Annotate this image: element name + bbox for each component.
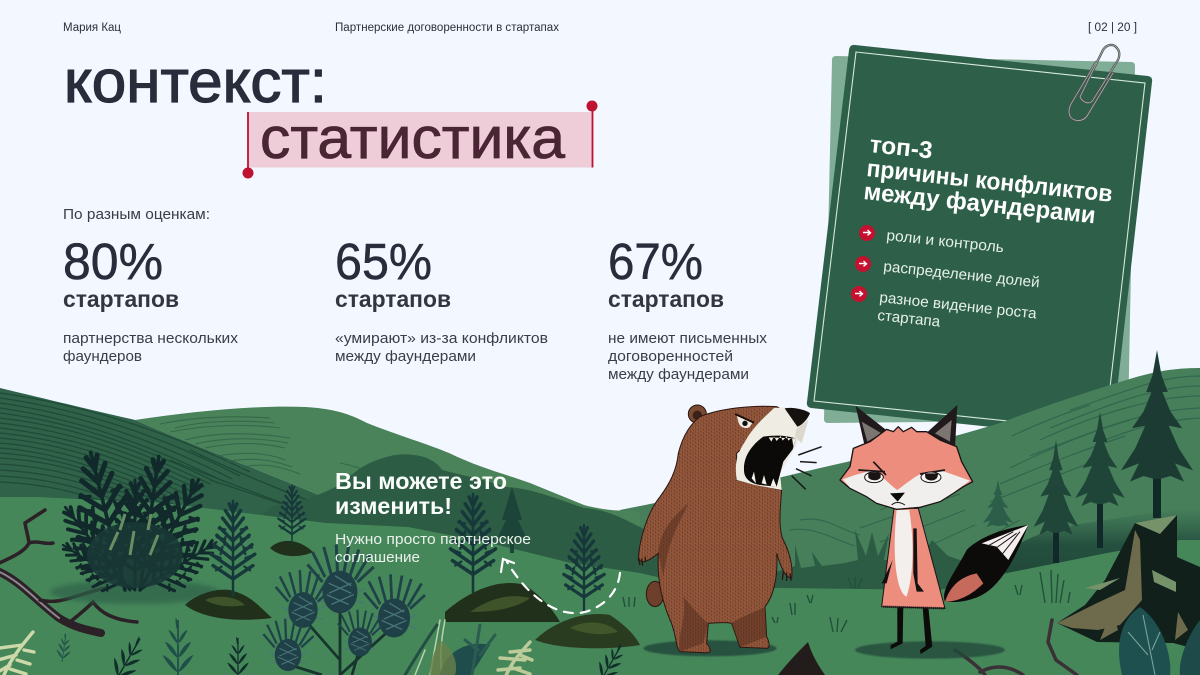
thistle plant [263,544,425,675]
bush shadow [50,580,220,604]
tree: mid fir [1075,412,1125,548]
arrow: dashed curve [501,559,620,613]
hill: left dark [0,388,430,532]
hill: right [620,368,1200,675]
icon: paperclip [1069,45,1119,120]
intro text: По разным оценкам: [63,206,210,223]
hills [0,368,1200,675]
stat 3: стартапов [608,286,724,312]
hill: middle [135,407,640,575]
tree: small fir [1034,440,1078,563]
list of reasons: роли и контроль [886,227,1005,256]
panel: top-3 note card [807,45,1152,439]
hill stripes: right [790,376,1200,560]
fox body [882,508,945,608]
tree: big fir [1121,350,1193,518]
stat 3: не имеют письменных [608,330,768,347]
call-to-action text: Нужно просто партнерское [335,532,531,548]
rock stump [1057,515,1200,650]
hill stripes: middle [160,416,360,476]
stat 1: стартапов [63,286,179,312]
branch: bottom right [955,620,1077,675]
dark bushes behind meadow [261,454,665,590]
note heading: причины конфликтов [865,155,1114,208]
branch: dead tree left [0,510,137,633]
fox tail [944,525,1028,602]
fox ears [856,405,957,448]
call-to-action text: соглашение [335,550,420,566]
title: context: контекст: [64,48,327,115]
list of reasons: стартапа [877,307,942,331]
list of reasons: распределение долей [883,258,1040,291]
stat 2: «умирают» из-за конфликтов [335,330,548,347]
stat 2: стартапов [335,286,451,312]
character: bear [638,405,822,656]
stat 1: фаундеров [63,348,142,365]
leaves: bottom right [1119,607,1200,675]
foreground foliage [0,618,631,675]
list of reasons [851,225,1040,331]
rock: foreground centre [778,642,825,675]
stat 2: 65% [335,233,432,290]
trees: right firs [983,350,1193,563]
stat 3: 67% [608,233,703,290]
call-to-action text: Вы можете это [335,468,507,494]
call-to-action text [335,468,531,566]
header: author: Мария Кац [63,22,121,34]
right-side background silhouettes [770,508,1200,590]
list of reasons: разное видение роста [879,289,1038,323]
stat 3 [608,233,768,383]
stat 3: между фаундерами [608,366,749,383]
stat 1: 80% [63,233,163,290]
note heading [862,131,1114,229]
grass tufts [623,570,1070,632]
hill stripes: left dark [0,392,306,504]
meadow ground [0,497,1200,675]
note heading: топ-3 [868,131,934,165]
big bush [46,444,227,608]
fox head [840,427,973,509]
mounds [185,541,640,648]
note heading: между фаундерами [862,178,1097,229]
stat 3: договоренностей [608,348,733,365]
stat 2: между фаундерами [335,348,476,365]
small pine silhouette [498,487,526,553]
header: page number: [ 02 | 20 ] [1088,22,1137,34]
tree: far fir [983,480,1013,527]
panel: back sheet of note [824,56,1135,423]
trees: left firs [211,485,604,613]
header: presentation title: Партнерские договоренности в стартапах [335,22,559,34]
stat 1: партнерства нескольких [63,330,239,347]
call-to-action text: изменить! [335,493,452,519]
title highlighted: statistics [242,100,598,178]
character: fox [840,405,1028,659]
title highlighted: statistics: статистика [260,106,566,171]
stat 2 [335,233,548,365]
stat 1 [63,233,239,365]
fox legs [891,607,932,654]
